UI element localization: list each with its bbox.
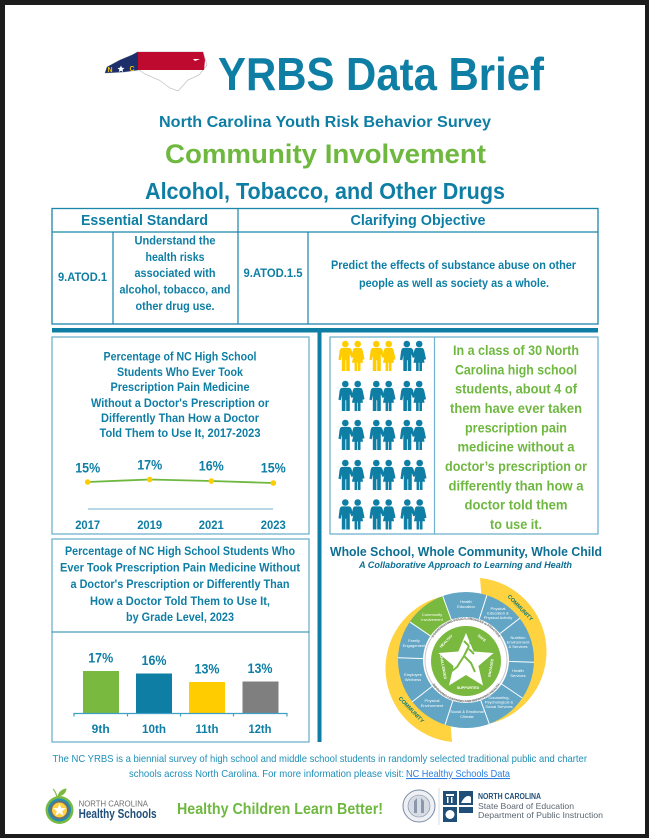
standard text: alcohol, tobacco, and [120, 284, 230, 296]
wheel sectors: Health [460, 599, 472, 604]
logo: NC State Board of Education seal and DPI [403, 788, 603, 825]
line chart: 15% [261, 460, 286, 476]
diagram: WSCC wheel [386, 578, 546, 742]
tagline: Healthy Children Learn Better! [177, 801, 383, 818]
wheel sectors: Climate [460, 714, 475, 719]
bar chart title: Percentage of NC High School Students Who [65, 546, 295, 558]
subtitle: survey name: North Carolina Youth Risk Behavior Survey [159, 114, 491, 131]
wheel sectors: Physical [425, 698, 440, 703]
wheel sectors: Physical [491, 606, 506, 611]
community yellow arcs: COMMUNITY [506, 594, 534, 623]
header: NC flag map and title [105, 48, 545, 100]
bar chart: 11th [196, 724, 218, 736]
wheel sectors: Environment [507, 640, 530, 644]
line chart [75, 458, 286, 532]
wheel sectors: Services [510, 673, 526, 678]
line chart: 2017 [75, 520, 100, 532]
wheel center: star and tenets: IMPROVING LEARNING AND IMPROVING HEALTH [432, 683, 500, 702]
logo: NC State Board of Education seal and DPI: NORTH CAROLINA [478, 792, 541, 801]
wheel sectors: Counseling, [488, 695, 510, 700]
wheel center: star and tenets [423, 617, 509, 703]
panel: bar chart by grade [52, 539, 309, 742]
logo: NC Healthy Schools [46, 789, 157, 824]
bar chart title: How a Doctor Told Them to Use It, [90, 596, 270, 608]
wheel sectors: Social Services [485, 704, 513, 709]
standard text [120, 236, 230, 313]
wheel center: star and tenets: SUPPORTED [457, 686, 480, 690]
line chart: 2019 [137, 520, 162, 532]
pictogram statement: them have ever taken [450, 401, 582, 416]
bar chart: 12th [248, 724, 272, 736]
bar chart: 9th [92, 724, 110, 736]
standard code: 9.ATOD.1 [58, 272, 108, 284]
wheel sectors: Nutrition [511, 635, 525, 640]
line chart title [91, 352, 269, 440]
bar chart: 13% [194, 662, 220, 677]
icon: North Carolina flag map [105, 52, 207, 91]
wheel sectors: Environment [421, 703, 444, 708]
pictogram statement: to use it. [490, 517, 542, 532]
standard text: associated with [134, 268, 216, 280]
line chart: 15% [75, 460, 100, 476]
line chart: 2021 [199, 520, 224, 532]
icon: North Carolina flag map: C [129, 66, 135, 73]
bar chart title: by Grade Level, 2023 [126, 612, 234, 624]
wheel center: star and tenets: CHALLENGED [439, 654, 447, 680]
panel: standards table [52, 208, 598, 324]
objective text: people as well as society as a whole. [359, 278, 549, 290]
line chart title: Percentage of NC High School [104, 352, 256, 364]
pictogram statement: doctor’s prescription or [445, 459, 588, 474]
panel: line chart 2017-2023 [52, 337, 309, 534]
icon: North Carolina flag map: N [107, 67, 113, 74]
pictogram: 30 students, 4 highlighted [339, 341, 426, 529]
bar chart title: a Doctor's Prescription or Differently Than [70, 579, 290, 591]
standard text: Understand the [134, 236, 216, 248]
line chart: 2023 [261, 520, 286, 532]
wheel sectors: Social & Emotional [450, 709, 484, 714]
bar chart: 13% [248, 661, 272, 676]
line chart title: Students Who Ever Took [117, 367, 244, 379]
bar chart [74, 651, 287, 736]
wheel sectors: Wellness [405, 677, 421, 682]
bar chart: 10th [142, 724, 166, 736]
pictogram statement: differently than how a [448, 478, 584, 493]
logo: NC State Board of Education seal and DPI: State Board of Education [478, 801, 574, 811]
community yellow arcs: COMMUNITY [397, 696, 425, 725]
logo: NC Healthy Schools: Healthy Schools [79, 806, 157, 821]
line chart title: Told Them to Use It, 2017-2023 [100, 428, 260, 440]
heading: Community Involvement: Community Involvement [165, 139, 486, 169]
standard text: health risks [146, 252, 204, 264]
bar chart: 16% [142, 653, 166, 668]
wheel center: star and tenets: ENGAGED [487, 658, 495, 677]
wheel sectors: Family [408, 638, 420, 643]
pictogram statement: students, about 4 of [455, 382, 577, 397]
footer note: schools across North Carolina. For more information please visit: [129, 768, 404, 780]
heading: Alcohol, Tobacco, and Other Drugs: Alcohol, Tobacco, and Other Drugs [145, 178, 505, 204]
line chart: 16% [199, 458, 224, 474]
line chart title: Prescription Pain Medicine [110, 382, 250, 394]
wheel sectors: Education [457, 604, 475, 609]
wheel sectors [398, 592, 534, 728]
icon: DPI emblem [443, 791, 473, 822]
pictogram statement: In a class of 30 North [453, 343, 579, 358]
wheel center: star and tenets: SAFE [477, 634, 487, 643]
bar chart title: Ever Took Prescription Pain Medicine Without [60, 563, 300, 575]
bar chart: 17% [88, 651, 113, 666]
footer note [52, 753, 587, 780]
title: YRBS Data Brief [218, 48, 545, 100]
wheel center: star and tenets: COORDINATING POLICY, PROCESS & PRACTICE [432, 617, 501, 638]
wheel center: star and tenets: HEALTHY [439, 634, 454, 649]
wheel sectors: Education & [487, 610, 509, 616]
heading: Whole School, Whole Community, Whole Child: Whole School, Whole Community, Whole Child [330, 545, 602, 559]
subheading: collaborative approach: A Collaborative Approach to Learning and Health [358, 560, 572, 571]
line chart: 17% [137, 458, 162, 472]
community yellow arcs [386, 578, 546, 742]
logo: NC Healthy Schools: NORTH CAROLINA [79, 799, 148, 809]
wheel sectors: Employee [404, 672, 423, 677]
pictogram statement: doctor told them [464, 498, 568, 513]
pictogram statement [445, 343, 588, 532]
wheel sectors: Community [422, 612, 442, 617]
line chart title: Without a Doctor's Prescription or [91, 398, 269, 410]
objective text: Predict the effects of substance abuse on other [331, 260, 576, 272]
link: NC Healthy Schools Data: NC Healthy Schools Data [406, 768, 510, 780]
pictogram statement: medicine without a [458, 440, 575, 455]
bar chart title [60, 546, 300, 624]
wheel sectors: Physical Activity [484, 615, 512, 620]
line chart title: Differently Than How a Doctor [101, 413, 259, 425]
table header: Essential Standard: Essential Standard [81, 212, 208, 229]
table header: Clarifying Objective: Clarifying Objective [350, 212, 486, 229]
standard text: other drug use. [136, 301, 214, 313]
wheel sectors: Psychological & [485, 700, 513, 704]
pictogram statement: prescription pain [465, 420, 567, 435]
pictogram statement: Carolina high school [455, 362, 577, 377]
wheel sectors: & Services [508, 644, 528, 649]
objective text [331, 260, 576, 290]
logo: NC State Board of Education seal and DPI: Department of Public Instruction [478, 810, 603, 820]
wheel sectors: Involvement [421, 617, 444, 622]
wheel sectors: Engagement [403, 643, 426, 648]
panel: class of 30 pictogram [330, 337, 598, 534]
objective code: 9.ATOD.1.5 [244, 268, 303, 280]
icon: state seal [403, 790, 435, 822]
footer note: The NC YRBS is a biennial survey of high school and middle school students in randomly selected traditional public and charter [52, 753, 587, 765]
wheel sectors: Health [512, 668, 524, 673]
